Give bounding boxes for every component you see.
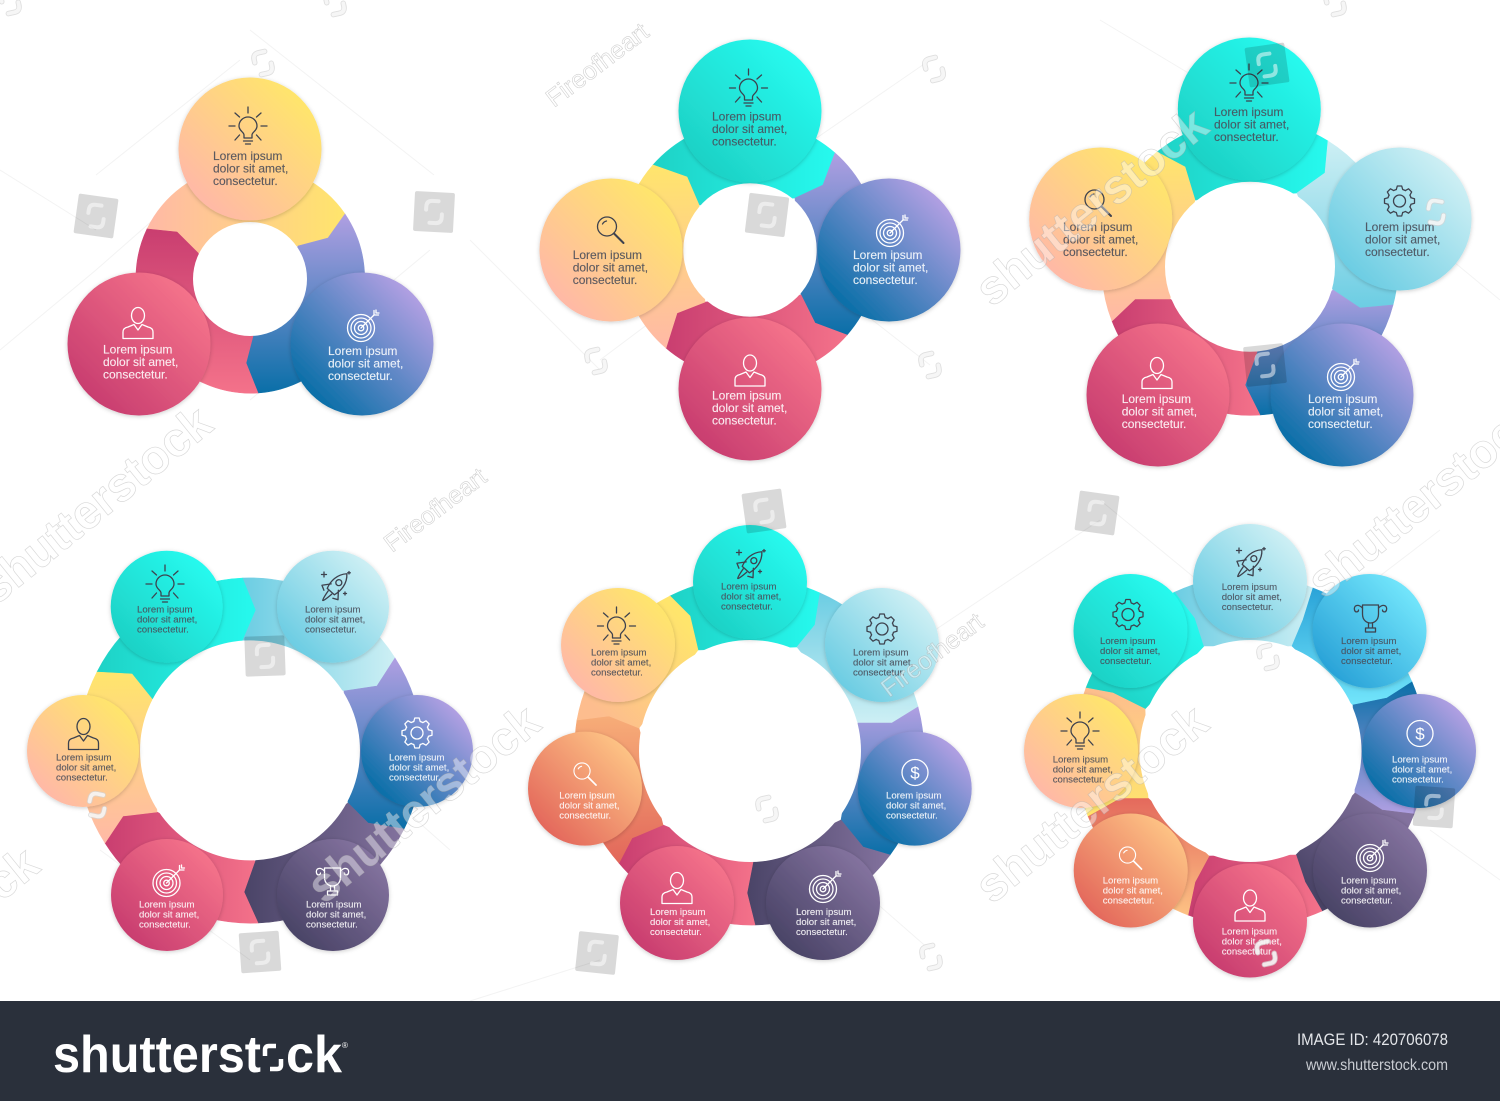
node text: consectetur. (1214, 130, 1279, 144)
icon: target (348, 310, 379, 342)
node: light-blue gear (825, 588, 939, 702)
node: teal rocket (693, 525, 807, 639)
node text: consectetur. (886, 810, 938, 821)
website: www.shutterstock.com (1305, 1057, 1448, 1074)
node text: Lorem ipsum (886, 790, 941, 801)
watermark: Fireofheart text: Fireofheart (541, 18, 654, 113)
node text: Lorem ipsum (1122, 392, 1191, 406)
node text: Lorem ipsum (305, 605, 360, 616)
node text: consectetur. (1222, 947, 1273, 958)
node text: consectetur. (1053, 774, 1104, 785)
icon: gear (1384, 186, 1414, 216)
node text: Lorem ipsum (721, 581, 776, 592)
node text: dolor sit amet, (328, 356, 403, 370)
watermark: shutterstock text: shutterstock (966, 695, 1218, 914)
node: yellow search (1029, 148, 1172, 290)
icon: rocket (730, 545, 770, 586)
node text: Lorem ipsum (1222, 582, 1277, 593)
node text: consectetur. (853, 668, 905, 679)
node text: Lorem ipsum (306, 900, 361, 911)
node: yellow bulb (561, 588, 675, 702)
node text: Lorem ipsum (796, 907, 851, 918)
watermark tiles (73, 42, 1455, 975)
icon: light bulb (1230, 64, 1268, 101)
icon: rocket (1230, 543, 1270, 584)
logo: shutterstock: ® (342, 1041, 348, 1050)
node: teal bulb (678, 40, 822, 182)
diagram: eight-item ring (1024, 524, 1476, 978)
node: blue dollar (858, 732, 972, 846)
node text: Lorem ipsum (1063, 220, 1132, 234)
icon: gear (1113, 600, 1143, 630)
node text: dolor sit amet, (1392, 764, 1452, 775)
icon: person (735, 355, 765, 386)
node text: Lorem ipsum (103, 342, 172, 356)
node: orange search (528, 732, 642, 846)
watermark: Fireofheart text (379, 18, 989, 703)
node text: Lorem ipsum (559, 790, 615, 801)
centre hole (1140, 640, 1362, 862)
node text: dolor sit amet, (853, 658, 913, 669)
node text: Lorem ipsum (1053, 754, 1108, 765)
node text: Lorem ipsum (1341, 875, 1396, 886)
node: pink person (1086, 324, 1230, 466)
diagram: six-item ring (27, 551, 473, 951)
node: teal gear (1074, 574, 1188, 688)
node text: consectetur. (1122, 417, 1186, 431)
node: blue target (818, 178, 960, 322)
node text: dolor sit amet, (1341, 885, 1401, 896)
node: blue dollar (1362, 694, 1476, 808)
node text: consectetur. (796, 927, 848, 938)
node text: Lorem ipsum (1103, 875, 1158, 886)
node text: Lorem ipsum (712, 110, 781, 124)
node: yellow bulb (178, 78, 322, 220)
node text: dolor sit amet, (1341, 646, 1401, 657)
node text: dolor sit amet, (1222, 592, 1282, 603)
logo: shutterstock: shutterst (53, 1026, 261, 1084)
node: dark-purple trophy (277, 839, 389, 951)
node text: dolor sit amet, (103, 355, 178, 369)
node text: dolor sit amet, (1122, 404, 1197, 418)
node text: consectetur. (573, 273, 637, 287)
icon: target (1356, 840, 1388, 872)
icon: target (810, 871, 841, 902)
node text: Lorem ipsum (1341, 636, 1396, 647)
node text: consectetur. (306, 920, 358, 931)
icon: magnifier (598, 217, 624, 243)
watermark: shutterstock text: shutterstock (966, 98, 1218, 317)
node: teal bulb (1178, 38, 1321, 180)
node text: consectetur. (1308, 417, 1373, 431)
node text: consectetur. (591, 668, 643, 679)
node: pink target (111, 839, 223, 951)
node text: dolor sit amet, (853, 260, 928, 274)
node: dark-purple target (766, 846, 880, 960)
node text: Lorem ipsum (712, 388, 781, 402)
icon: light bulb (730, 69, 768, 106)
node: light-blue rocket (277, 551, 389, 663)
node text: dolor sit amet, (56, 763, 116, 774)
node text: dolor sit amet, (305, 615, 365, 626)
icon: person (1142, 358, 1172, 388)
node text: dolor sit amet, (573, 260, 648, 274)
node text: Lorem ipsum (1392, 754, 1447, 765)
node text: consectetur. (712, 135, 777, 149)
node text: dolor sit amet, (712, 401, 787, 415)
icon: magnifier (574, 763, 596, 785)
footer bar (0, 1001, 1500, 1101)
node: blue target (290, 272, 434, 416)
node text: dolor sit amet, (796, 917, 856, 928)
node text: consectetur. (1103, 895, 1154, 906)
diagram: four-item ring (540, 40, 960, 460)
node text: consectetur. (650, 927, 702, 938)
node text: Lorem ipsum (328, 344, 397, 358)
node text: dolor sit amet, (1100, 646, 1160, 657)
node text: dolor sit amet, (1222, 937, 1282, 948)
node text: Lorem ipsum (56, 753, 111, 764)
centre hole (639, 640, 861, 862)
node text: consectetur. (1392, 774, 1444, 785)
node text: consectetur. (1222, 602, 1273, 613)
node text: consectetur. (389, 773, 441, 784)
node text: dolor sit amet, (559, 800, 620, 811)
icon: light bulb (146, 565, 184, 602)
node text: consectetur. (103, 368, 168, 382)
node text: Lorem ipsum (1100, 636, 1155, 647)
ring segments (575, 577, 924, 925)
node text: dolor sit amet, (1103, 885, 1163, 896)
centre hole (193, 222, 307, 336)
node text: consectetur. (328, 369, 393, 383)
diagram: seven-item ring (528, 525, 972, 960)
ring segments (621, 121, 879, 379)
icon: person (123, 308, 153, 338)
icon: trophy (316, 868, 349, 895)
node text: Lorem ipsum (1214, 105, 1283, 119)
node text: dolor sit amet, (650, 917, 710, 928)
node text: consectetur. (139, 920, 191, 931)
watermark: shutterstock text: shutterstock (298, 695, 550, 914)
node: pink person (68, 272, 210, 416)
node: light-blue rocket (1193, 524, 1307, 638)
node: blue gear (361, 695, 473, 807)
node text: Lorem ipsum (853, 248, 922, 262)
node text: consectetur. (1341, 656, 1393, 667)
node text: consectetur. (721, 601, 773, 612)
centre hole (140, 640, 360, 860)
node text: Lorem ipsum (573, 248, 642, 262)
node: orange search (1074, 814, 1188, 928)
ring segments (136, 164, 365, 393)
node text: dolor sit amet, (712, 122, 787, 136)
diagram: three-item ring (68, 78, 434, 416)
node text: dolor sit amet, (721, 591, 781, 602)
node text: dolor sit amet, (1365, 232, 1440, 246)
node text: consectetur. (1063, 245, 1128, 259)
node text: dolor sit amet, (139, 910, 199, 921)
node text: Lorem ipsum (650, 907, 705, 918)
node text: dolor sit amet, (1063, 232, 1138, 246)
node text: dolor sit amet, (886, 800, 946, 811)
logo: shutterstock: ck (286, 1026, 342, 1084)
ring segments (1075, 576, 1426, 926)
icon: person (68, 718, 98, 750)
node text: Lorem ipsum (1308, 392, 1377, 406)
centre hole (683, 183, 817, 317)
node: teal bulb (111, 551, 223, 663)
node text: dolor sit amet, (137, 615, 197, 626)
image id: IMAGE ID: 420706078 (1297, 1031, 1448, 1049)
node text: Lorem ipsum (213, 149, 282, 163)
icon: light bulb (598, 607, 636, 644)
icon: magnifier (1085, 190, 1111, 216)
node: pink person (620, 846, 734, 960)
icon: gear (867, 614, 897, 644)
icon: dollar coin: $ (910, 764, 920, 782)
icon: target (1328, 359, 1359, 390)
node: pink person (1193, 864, 1307, 978)
icon: trophy (1354, 605, 1387, 632)
node text: dolor sit amet, (389, 763, 449, 774)
node text: consectetur. (137, 625, 189, 636)
node text: Lorem ipsum (1365, 220, 1434, 234)
node text: consectetur. (1365, 245, 1430, 259)
node: sky-blue trophy (1312, 574, 1426, 688)
node text: consectetur. (213, 174, 278, 188)
node text: Lorem ipsum (389, 753, 444, 764)
node: light-blue gear (1328, 148, 1472, 290)
watermark: Fireofheart text: Fireofheart (379, 463, 492, 558)
node: blue target (1270, 324, 1414, 466)
node text: consectetur. (1341, 895, 1393, 906)
node text: Lorem ipsum (591, 648, 646, 659)
node text: Lorem ipsum (139, 900, 194, 911)
icon: person (662, 872, 692, 904)
node text: Lorem ipsum (853, 648, 908, 659)
node text: consectetur. (1100, 656, 1152, 667)
node: yellow bulb (1024, 694, 1138, 808)
node text: consectetur. (712, 413, 777, 427)
node: yellow search (540, 178, 682, 322)
node: dark-purple target (1313, 814, 1427, 928)
node text: dolor sit amet, (1308, 404, 1383, 418)
node text: consectetur. (853, 273, 918, 287)
ring segments (1102, 119, 1398, 415)
diagram: five-item ring (1029, 38, 1472, 466)
icon: light bulb (229, 107, 267, 144)
node text: dolor sit amet, (1214, 118, 1289, 132)
icon: person (1235, 890, 1265, 921)
node text: dolor sit amet, (213, 162, 288, 176)
watermark: Fireofheart text: Fireofheart (876, 608, 989, 703)
node text: Lorem ipsum (137, 605, 192, 616)
node text: consectetur. (56, 773, 108, 784)
icon: gear (402, 718, 432, 748)
centre hole (1165, 182, 1335, 352)
node text: dolor sit amet, (1053, 764, 1113, 775)
icon: dollar coin: $ (1415, 724, 1425, 744)
icon: light bulb (1061, 712, 1099, 749)
icon: target (153, 865, 184, 896)
ring segments (78, 578, 422, 923)
node text: consectetur. (559, 810, 611, 821)
icon: rocket (315, 567, 355, 608)
node: pink person (678, 318, 822, 460)
icon: target (876, 215, 908, 246)
icon: magnifier (1119, 847, 1142, 869)
node: yellow person (27, 695, 139, 807)
node text: Lorem ipsum (1222, 927, 1277, 938)
node text: consectetur. (305, 625, 357, 636)
node text: dolor sit amet, (591, 658, 651, 669)
node text: dolor sit amet, (306, 910, 366, 921)
